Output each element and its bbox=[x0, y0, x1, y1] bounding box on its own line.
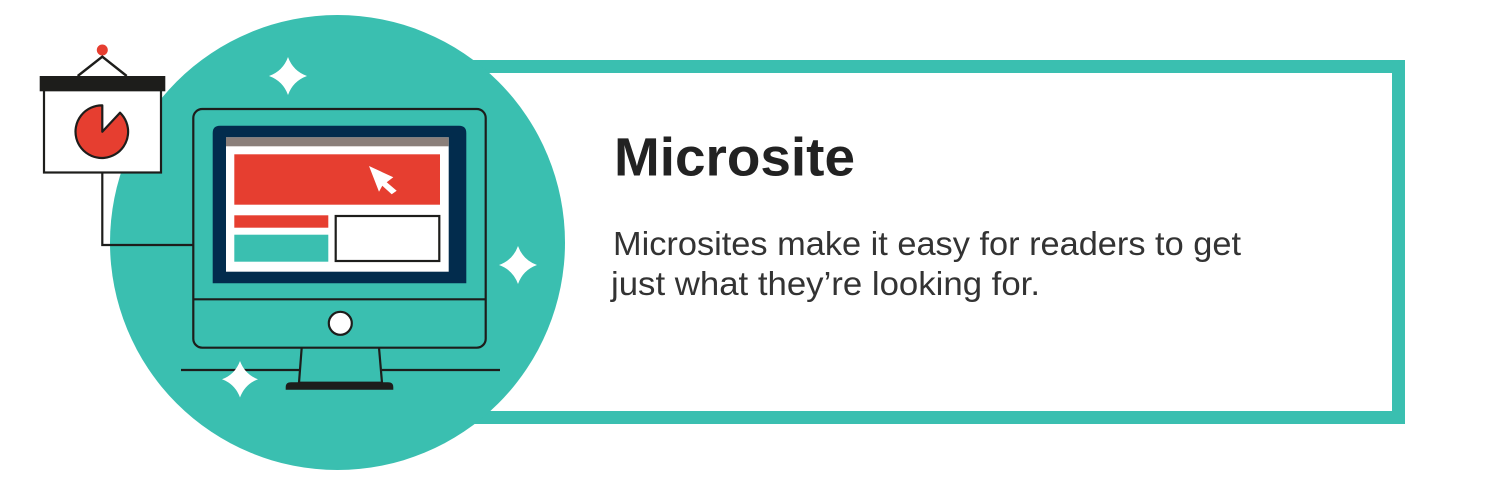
outlined white box bbox=[336, 216, 439, 261]
pie chart bbox=[76, 105, 128, 158]
icon: desktop monitor bbox=[181, 109, 500, 390]
red hero block bbox=[234, 154, 440, 205]
heading: Microsite bbox=[614, 128, 855, 188]
monitor base bbox=[286, 382, 393, 390]
monitor body bbox=[193, 109, 486, 348]
monitor button bbox=[329, 312, 352, 335]
icon: sparkle top bbox=[269, 57, 307, 95]
table line left bbox=[181, 369, 299, 371]
panel: teal outlined frame bbox=[400, 66, 1398, 418]
monitor stand bbox=[299, 348, 382, 383]
projection screen bbox=[44, 90, 161, 172]
teal circle background bbox=[110, 15, 565, 470]
small red block bbox=[234, 215, 328, 228]
icon: cursor arrow bbox=[369, 166, 397, 194]
icon: presentation screen with pie chart bbox=[40, 44, 194, 245]
body text: just what they’re looking for. bbox=[610, 265, 1040, 302]
browser bar bbox=[226, 137, 449, 146]
hanger pin bbox=[97, 44, 108, 56]
small teal block bbox=[234, 235, 328, 262]
web page bbox=[226, 137, 449, 272]
body text: Microsites make it easy for readers to get bbox=[613, 225, 1241, 262]
hanger string bbox=[78, 57, 127, 76]
icon: sparkle bottom bbox=[222, 361, 258, 398]
screen top bar bbox=[40, 76, 165, 91]
monitor chin divider bbox=[193, 298, 486, 300]
monitor bezel bbox=[213, 126, 466, 283]
icon: sparkle right bbox=[499, 246, 537, 284]
connector line from screen to monitor bbox=[102, 173, 194, 245]
table line right bbox=[382, 369, 500, 371]
